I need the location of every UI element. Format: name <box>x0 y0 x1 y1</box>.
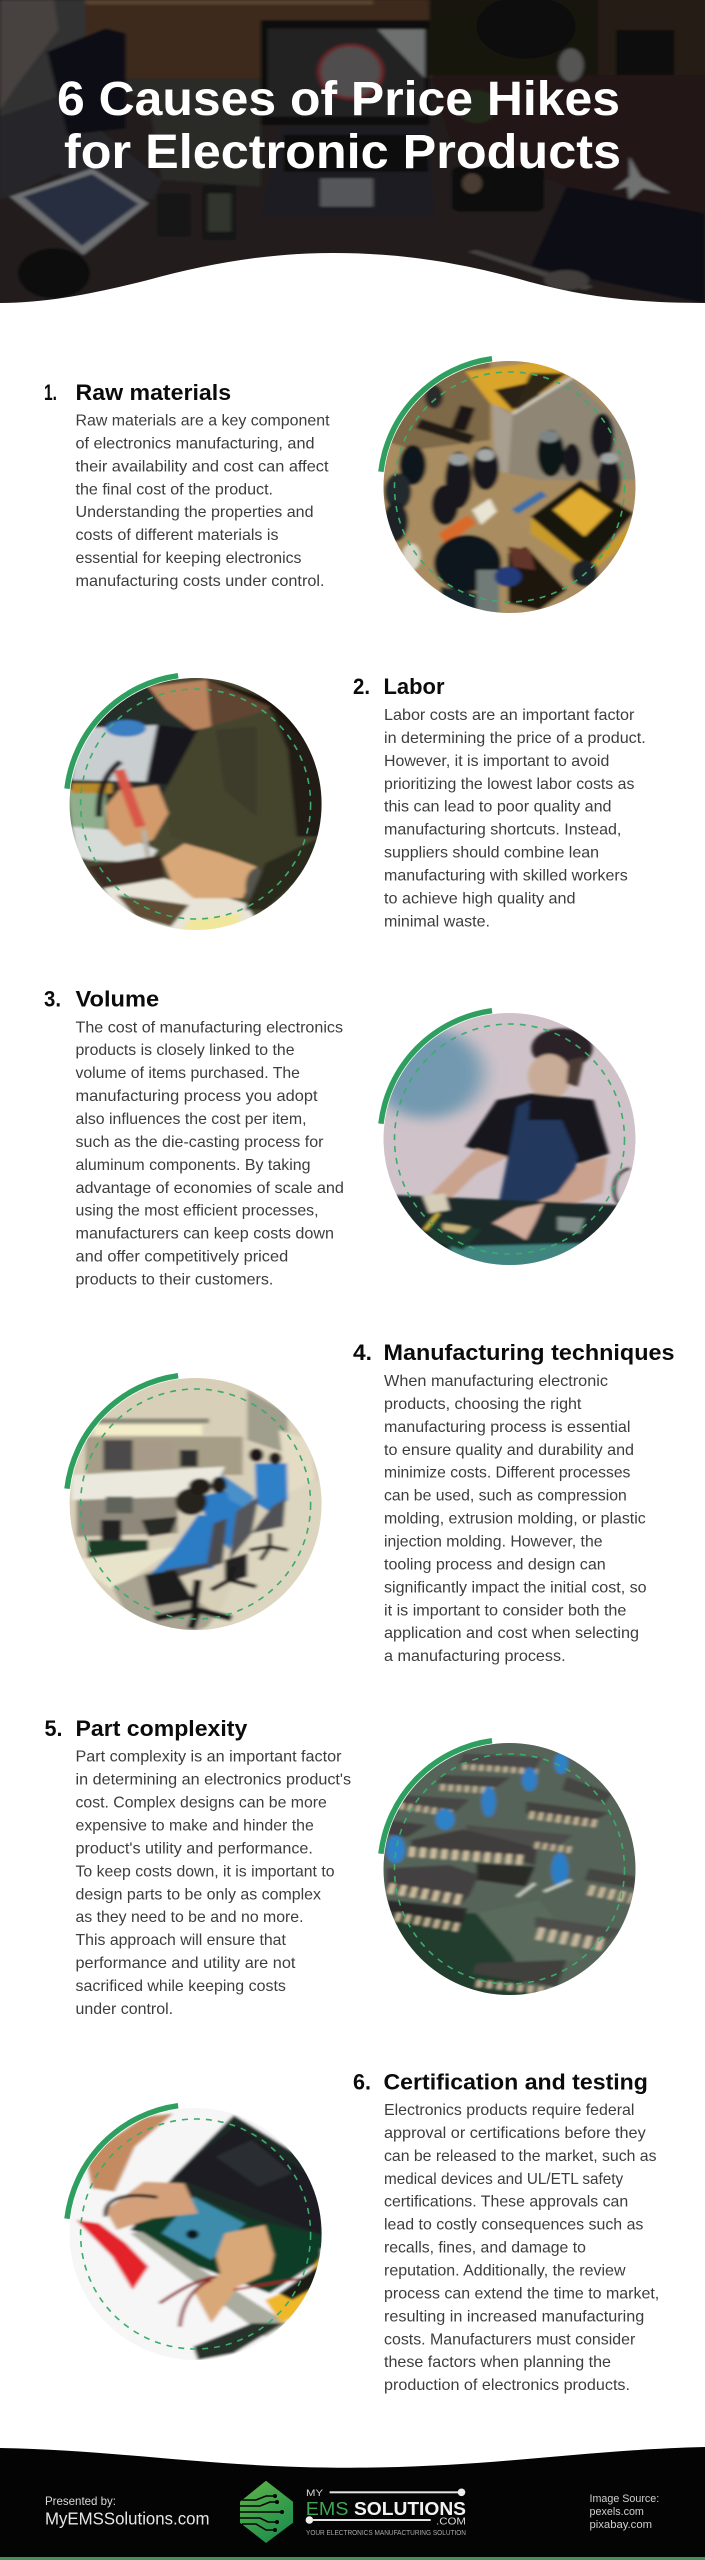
text block: certification and testing: can be released to the market, such as <box>384 2148 656 2165</box>
text block: certification and testing: certifications. These approvals can <box>384 2194 628 2211</box>
panel: 3 volume <box>44 987 643 1288</box>
logo wordmark: YOUR ELECTRONICS MANUFACTURING SOLUTION <box>306 2530 466 2537</box>
green arc <box>381 1741 492 1854</box>
text block: manufacturing techniques: manufacturing process is essential <box>384 1419 630 1436</box>
text block: manufacturing techniques: can be used, such as compression <box>384 1488 627 1505</box>
panel: 2 labor <box>63 673 646 933</box>
text block: volume: advantage of economies of scale and <box>76 1180 344 1197</box>
heading: raw materials: 1. <box>44 380 57 405</box>
text block: manufacturing techniques: molding, extrusion molding, or plastic <box>384 1511 646 1528</box>
image sources: Image Source: <box>590 2493 659 2505</box>
text block: labor: manufacturing with skilled workers <box>384 868 628 884</box>
heading: raw materials: Raw materials <box>76 380 231 405</box>
presented by: MyEMSSolutions.com <box>45 2508 210 2528</box>
title: for Electronic Products <box>64 126 621 179</box>
text block: volume: manufacturers can keep costs down <box>76 1226 334 1243</box>
photo: testing a circuit board <box>63 2103 328 2367</box>
text block: raw materials: costs of different materials is <box>76 527 278 544</box>
text block: labor: prioritizing the lowest labor costs as <box>384 776 634 793</box>
text block: raw materials: of electronics manufacturing, and <box>76 435 314 452</box>
logo wordmark: MY <box>306 2488 323 2498</box>
photo: circuit board with capacitors <box>378 357 643 617</box>
text block: manufacturing techniques: minimize costs. Different processes <box>384 1465 630 1482</box>
text block: certification and testing: approval or certifications before they <box>384 2125 646 2142</box>
text block: part complexity <box>76 1749 351 2018</box>
heading: manufacturing techniques: Manufacturing techniques <box>384 1340 674 1365</box>
image sources <box>590 2493 659 2531</box>
text block: part complexity: as they need to be and no more. <box>76 1909 304 1926</box>
text block: part complexity: product's utility and performance. <box>76 1840 313 1857</box>
dashed ring <box>81 2119 311 2349</box>
text block: certification and testing: Electronics products require federal <box>384 2102 634 2119</box>
photo: circuit board with chips <box>378 1737 643 2000</box>
heading: volume: Volume <box>76 987 159 1012</box>
logo: MyEMS Solutions <box>240 2481 466 2543</box>
text block: part complexity: Part complexity is an important factor <box>76 1749 342 1766</box>
green arc <box>67 676 178 789</box>
green arc <box>67 2106 178 2219</box>
footer green strip <box>0 2557 705 2560</box>
text block: raw materials: Raw materials are a key component <box>76 412 330 430</box>
photo: woman assembling electronics <box>371 1010 643 1270</box>
heading: labor: Labor <box>384 674 445 699</box>
text block: manufacturing techniques: it is important to consider both the <box>384 1602 627 1619</box>
text block: labor: suppliers should combine lean <box>384 845 599 862</box>
text block: certification and testing: costs. Manufacturers must consider <box>384 2331 636 2348</box>
text block: manufacturing techniques: application and cost when selecting <box>384 1625 639 1642</box>
dashed ring <box>394 1754 624 1984</box>
heading: part complexity: Part complexity <box>76 1716 248 1741</box>
text block: labor: to achieve high quality and <box>384 890 576 907</box>
text block: part complexity: cost. Complex designs can be more <box>76 1795 327 1812</box>
text block: manufacturing techniques: tooling process and design can <box>384 1556 606 1573</box>
panel: 5 part complexity <box>44 1716 643 2018</box>
text block: certification and testing: process can extend the time to market, <box>384 2285 659 2302</box>
text block: volume: using the most efficient processes, <box>76 1203 318 1220</box>
text block: labor <box>384 707 646 930</box>
green arc <box>381 1011 492 1124</box>
text block: part complexity: sacrificed while keeping costs <box>76 1978 286 1995</box>
logo hexagon icon <box>240 2481 293 2543</box>
image sources: pexels.com <box>590 2506 644 2518</box>
heading: volume <box>44 987 159 1012</box>
text block: raw materials <box>76 412 330 590</box>
text block: part complexity: under control. <box>76 2001 173 2018</box>
header photo background <box>0 0 705 327</box>
text block: labor: minimal waste. <box>384 913 490 930</box>
text block: raw materials: Understanding the properties and <box>76 504 314 521</box>
dashed ring <box>81 1389 311 1619</box>
logo wordmark <box>306 2488 466 2537</box>
presented by <box>45 2494 210 2528</box>
text block: volume <box>76 1019 344 1288</box>
text block: certification and testing: lead to costly consequences such as <box>384 2217 643 2234</box>
text block: certification and testing: medical devices and UL/ETL safety <box>384 2171 623 2188</box>
text block: volume: products to their customers. <box>76 1272 273 1288</box>
logo wordmark: EMS <box>306 2499 348 2519</box>
text block: volume: also influences the cost per item, <box>76 1111 306 1128</box>
text block: raw materials: manufacturing costs under control. <box>76 573 324 590</box>
text block: certification and testing <box>384 2102 659 2394</box>
heading: part complexity: 5. <box>44 1716 62 1741</box>
heading: labor <box>353 674 445 699</box>
text block: manufacturing techniques: injection molding. However, the <box>384 1534 603 1550</box>
photo: technician soldering <box>63 673 328 933</box>
text block: certification and testing: reputation. Additionally, the review <box>384 2262 626 2280</box>
text block: manufacturing techniques: products, choosing the right <box>384 1396 582 1413</box>
text block: part complexity: design parts to be only as complex <box>76 1886 321 1903</box>
text block: certification and testing: production of electronics products. <box>384 2377 630 2394</box>
text block: labor: manufacturing shortcuts. Instead, <box>384 822 621 839</box>
text block: part complexity: performance and utility are not <box>76 1955 296 1972</box>
text block: manufacturing techniques: significantly impact the initial cost, so <box>384 1579 647 1596</box>
text block: labor: in determining the price of a product. <box>384 730 646 747</box>
text block: labor: this can lead to poor quality and <box>384 799 612 816</box>
text block: manufacturing techniques: a manufacturing process. <box>384 1648 566 1665</box>
heading: certification and testing: Certification and testing <box>384 2069 648 2094</box>
dashed ring <box>81 689 311 919</box>
text block: raw materials: essential for keeping electronics <box>76 550 302 567</box>
presented by: Presented by: <box>45 2494 116 2508</box>
text block: raw materials: the final cost of the product. <box>76 481 273 498</box>
panel: 1 raw materials <box>44 357 643 617</box>
text block: part complexity: in determining an electronics product's <box>76 1772 351 1789</box>
text block: certification and testing: resulting in increased manufacturing <box>384 2308 644 2325</box>
text block: part complexity: To keep costs down, it is important to <box>76 1863 335 1880</box>
heading: certification and testing: 6. <box>353 2069 371 2094</box>
text block: certification and testing: these factors when planning the <box>384 2354 611 2371</box>
text block: part complexity: This approach will ensure that <box>76 1932 286 1949</box>
heading: volume: 3. <box>44 987 61 1012</box>
text block: volume: and offer competitively priced <box>76 1249 288 1266</box>
dashed ring <box>394 372 624 602</box>
logo wordmark: .COM <box>436 2516 466 2528</box>
text block: raw materials: their availability and cost can affect <box>76 458 329 475</box>
text block: volume: The cost of manufacturing electronics <box>76 1019 343 1036</box>
heading: labor: 2. <box>353 674 370 699</box>
panel: 6 certification and testing <box>63 2069 659 2394</box>
photo: factory workers in blue coats <box>63 1373 328 1633</box>
green arc <box>381 359 492 472</box>
footer black wave band <box>0 2447 705 2557</box>
text block: manufacturing techniques <box>384 1373 647 1665</box>
text block: volume: products is closely linked to the <box>76 1042 295 1059</box>
panel: 4 manufacturing techniques <box>63 1340 675 1665</box>
text block: certification and testing: recalls, fines, and damage to <box>384 2240 586 2257</box>
text block: manufacturing techniques: to ensure quality and durability and <box>384 1442 634 1459</box>
text block: labor: Labor costs are an important factor <box>384 707 635 724</box>
dashed ring <box>394 1024 624 1254</box>
text block: manufacturing techniques: When manufacturing electronic <box>384 1373 608 1390</box>
text block: volume: manufacturing process you adopt <box>76 1088 318 1105</box>
title <box>57 73 621 179</box>
logo wordmark: SOLUTIONS <box>354 2499 466 2519</box>
footer <box>0 2447 705 2560</box>
heading: manufacturing techniques: 4. <box>353 1340 372 1365</box>
text block: volume: such as the die-casting process for <box>76 1134 324 1151</box>
text block: part complexity: expensive to make and hinder the <box>76 1818 314 1834</box>
green arc <box>67 1376 178 1489</box>
text block: volume: volume of items purchased. The <box>76 1065 300 1082</box>
text block: labor: However, it is important to avoid <box>384 753 609 770</box>
image sources: pixabay.com <box>590 2519 652 2531</box>
header white wave edge <box>0 253 705 312</box>
title: 6 Causes of Price Hikes <box>57 73 620 126</box>
text block: volume: aluminum components. By taking <box>76 1157 310 1174</box>
